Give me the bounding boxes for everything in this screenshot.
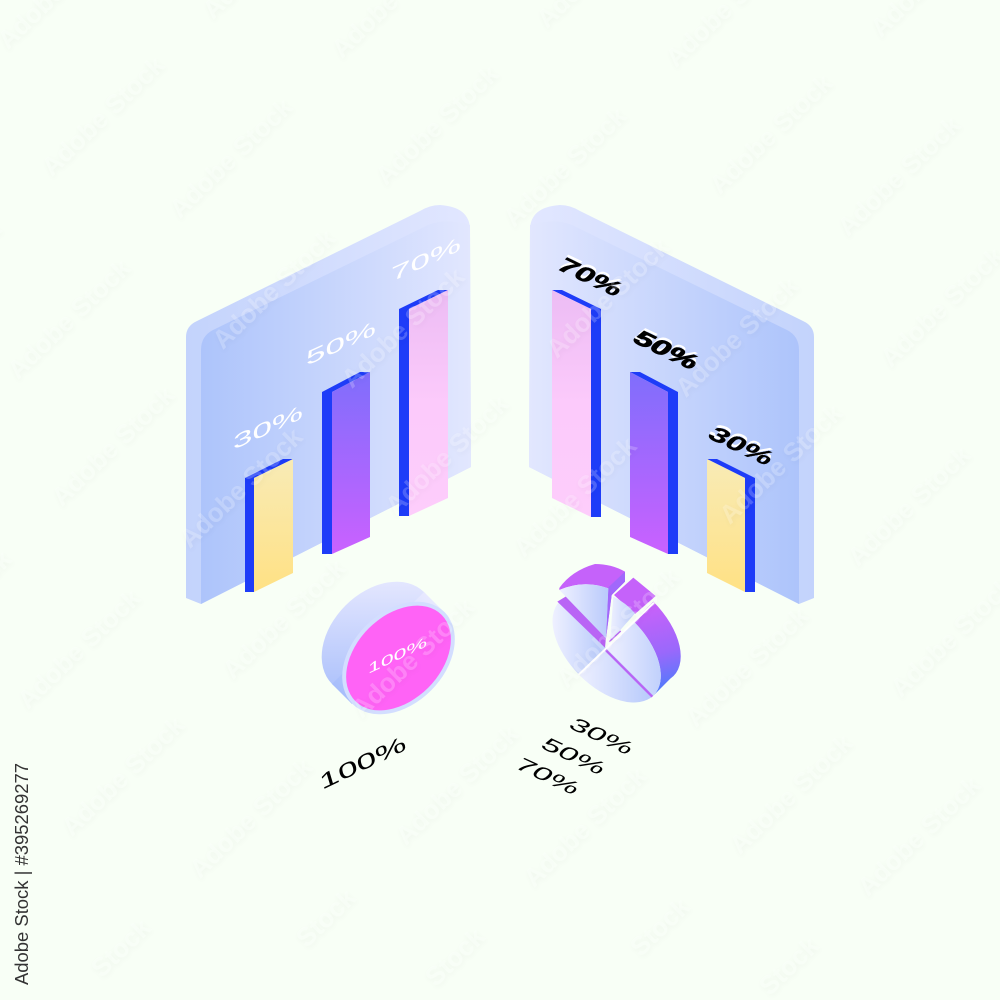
stock watermarks: Adobe Stock xyxy=(173,421,309,554)
stock watermarks: Stock xyxy=(419,921,491,992)
stock watermarks: Adobe Stock xyxy=(831,109,967,242)
stock watermarks: Adobe Stock xyxy=(35,49,171,182)
stock watermarks: Stock xyxy=(624,891,696,962)
right bar chart panel xyxy=(529,205,814,604)
stock watermarks: Adobe Stock xyxy=(507,430,643,563)
stock watermarks: Adobe Stock xyxy=(216,552,352,685)
stock watermarks: Adobe Stock xyxy=(669,270,805,403)
stock watermarks: Stock xyxy=(753,930,825,1000)
disc label 100%: 100% xyxy=(368,634,427,677)
stock watermarks: Adobe Stock xyxy=(713,397,849,530)
left bar 30% xyxy=(245,459,293,592)
stock watermarks: Adobe Stock xyxy=(723,727,859,860)
stock watermarks: Adobe Stock xyxy=(335,261,471,394)
right bar 30% xyxy=(707,459,755,592)
pie chart xyxy=(553,564,681,702)
stock watermarks: Adobe Stock xyxy=(841,439,977,572)
stock watermarks: Adobe Stock xyxy=(703,67,839,200)
stock watermarks: Adobe Stock xyxy=(679,600,815,733)
full circle 100% disc xyxy=(300,560,477,736)
right label 50%: 50% xyxy=(627,327,705,374)
right label 30%: 30% xyxy=(703,420,781,467)
left bar 50% xyxy=(322,372,370,554)
right label 70%: 70% xyxy=(551,254,629,301)
pie side xyxy=(634,602,681,695)
right label 30%: 30% xyxy=(702,423,780,470)
pie face right sector xyxy=(607,621,661,695)
right bar 50% xyxy=(630,372,678,554)
label 50% below pie: 50% xyxy=(536,734,612,778)
label 70% below pie: 70% xyxy=(510,754,586,798)
pie face left sector xyxy=(553,601,607,675)
pie thin divider xyxy=(605,649,652,697)
stock watermarks: Stock xyxy=(85,912,157,983)
stock watermarks: Adobe Stock xyxy=(851,769,987,902)
left label 30%: 30% xyxy=(233,400,303,455)
stock watermarks: Stock xyxy=(290,882,362,953)
left bar chart panel xyxy=(186,205,471,604)
stock watermarks: Adobe Stock xyxy=(389,718,525,851)
stock watermarks: Adobe Stock xyxy=(1,252,137,385)
stock watermarks: Adobe Stock xyxy=(550,561,686,694)
stock watermarks: Adobe Stock xyxy=(379,388,515,521)
stock watermarks: Adobe Stock xyxy=(517,760,653,893)
stock watermarks: Adobe Stock xyxy=(206,222,342,355)
left label 50%: 50% xyxy=(306,316,376,371)
label 100% below disc: 100% xyxy=(317,732,409,795)
stock watermarks: Adobe Stock xyxy=(55,709,191,842)
stock watermarks: Adobe Stock xyxy=(163,91,299,224)
pie face bottom sector xyxy=(580,648,654,702)
vertical stock id text: Adobe Stock | #395269277 xyxy=(12,763,32,985)
stock watermarks: Adobe Stock xyxy=(497,100,633,233)
right label 70%: 70% xyxy=(552,251,630,298)
right label 50%: 50% xyxy=(628,324,706,371)
stock watermarks: Adobe Stock xyxy=(45,379,181,512)
upper left wedge xyxy=(559,564,625,638)
right bar 70% xyxy=(552,290,601,517)
pink disc face xyxy=(326,585,471,731)
label 30% below pie: 30% xyxy=(564,714,640,758)
stock watermarks: Adobe Stock xyxy=(11,582,147,715)
pie white divider xyxy=(578,603,654,675)
left label 70%: 70% xyxy=(391,232,461,287)
upper right wedge xyxy=(609,578,656,642)
stock watermarks: Adobe Stock xyxy=(540,231,676,364)
stock watermarks: Adobe Stock xyxy=(183,751,319,884)
left bar 70% xyxy=(399,290,448,516)
stock watermarks: Adobe Stock xyxy=(345,591,481,724)
pie thick band xyxy=(557,596,606,648)
stock watermarks: Adobe Stock xyxy=(369,58,505,191)
